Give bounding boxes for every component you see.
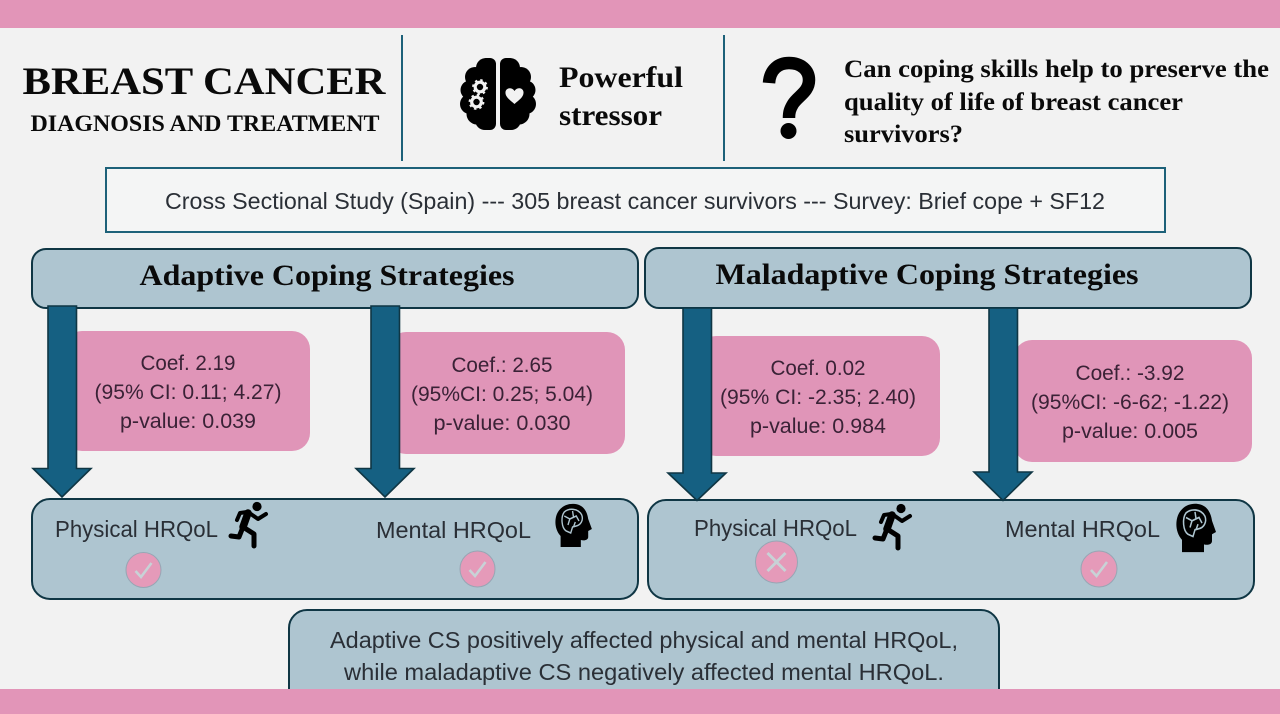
heading: adaptive coping strategies [32, 249, 638, 308]
heading: maladaptive coping strategies [645, 248, 1251, 308]
coefficient callout: maladaptive physical: (95% CI: -2.35; 2.40) [720, 386, 916, 409]
check: mental [460, 551, 495, 587]
arrow: adaptive to physical [33, 306, 91, 497]
research question: survivors? [844, 119, 963, 148]
coefficient callout: maladaptive mental: Coef.: -3.92 [1076, 362, 1184, 385]
top pink band [0, 0, 1280, 28]
title [22, 60, 386, 136]
title: DIAGNOSIS AND TREATMENT [30, 111, 380, 136]
icon: head with brain [555, 504, 592, 547]
mental HRQoL label: Mental HRQoL [1005, 516, 1160, 542]
arrow: maladaptive to mental [974, 308, 1032, 500]
mental HRQoL label: Mental HRQoL [376, 517, 531, 543]
coefficient callout: maladaptive mental [1014, 340, 1252, 462]
coefficient callout: adaptive mental: p-value: 0.030 [434, 412, 570, 435]
coefficient callout: adaptive physical: Coef. 2.19 [140, 352, 236, 375]
coefficient callout: adaptive mental [388, 332, 625, 454]
icon: runner [875, 504, 910, 548]
panel: maladaptive outcomes [648, 500, 1254, 599]
arrow: maladaptive to physical [668, 308, 726, 500]
icon: runner [231, 502, 266, 546]
coefficient callout: maladaptive physical: p-value: 0.984 [750, 415, 886, 438]
text: powerful stressor [559, 61, 683, 132]
arrow: adaptive to mental [356, 306, 414, 497]
bottom pink band [0, 689, 1280, 714]
research question [844, 54, 1269, 148]
coefficient callout: adaptive physical [64, 331, 310, 451]
coefficient callout: maladaptive mental: p-value: 0.005 [1062, 420, 1198, 443]
check: mental [1081, 551, 1117, 587]
icon: head with brain [1176, 504, 1216, 552]
icon: question mark [769, 63, 809, 139]
physical HRQoL label: Physical HRQoL [694, 515, 857, 541]
text: powerful stressor: stressor [559, 99, 662, 132]
conclusion box: Adaptive CS positively affected physical and mental HRQoL, [330, 627, 958, 653]
heading: adaptive coping strategies: Adaptive Coping Strategies [140, 259, 514, 292]
coefficient callout: maladaptive physical: Coef. 0.02 [770, 357, 866, 380]
coefficient callout: adaptive physical: (95% CI: 0.11; 4.27) [94, 381, 282, 404]
coefficient callout: maladaptive mental: (95%CI: -6-62; -1.22) [1031, 391, 1229, 414]
physical HRQoL label: Physical HRQoL [55, 516, 218, 542]
study description box: Cross Sectional Study (Spain) --- 305 breast cancer survivors --- Survey: Brief cope + SF12 [165, 188, 1105, 214]
coefficient callout: maladaptive physical [698, 336, 940, 456]
title: BREAST CANCER [22, 60, 386, 103]
study description box [106, 168, 1165, 232]
heading: maladaptive coping strategies: Maladaptive Coping Strategies [716, 258, 1138, 291]
cross: physical [756, 541, 798, 583]
conclusion box: while maladaptive CS negatively affected mental HRQoL. [343, 659, 944, 685]
research question: Can coping skills help to preserve the [844, 54, 1269, 83]
coefficient callout: adaptive mental: (95%CI: 0.25; 5.04) [411, 383, 593, 406]
coefficient callout: adaptive physical: p-value: 0.039 [120, 410, 256, 433]
check: physical [126, 552, 161, 588]
research question: quality of life of breast cancer [844, 87, 1183, 116]
text: powerful stressor: Powerful [559, 61, 683, 94]
panel: adaptive outcomes [32, 499, 638, 599]
coefficient callout: adaptive mental: Coef.: 2.65 [452, 354, 552, 377]
conclusion box [289, 610, 999, 710]
icon: brain with gears and heart [460, 58, 536, 130]
